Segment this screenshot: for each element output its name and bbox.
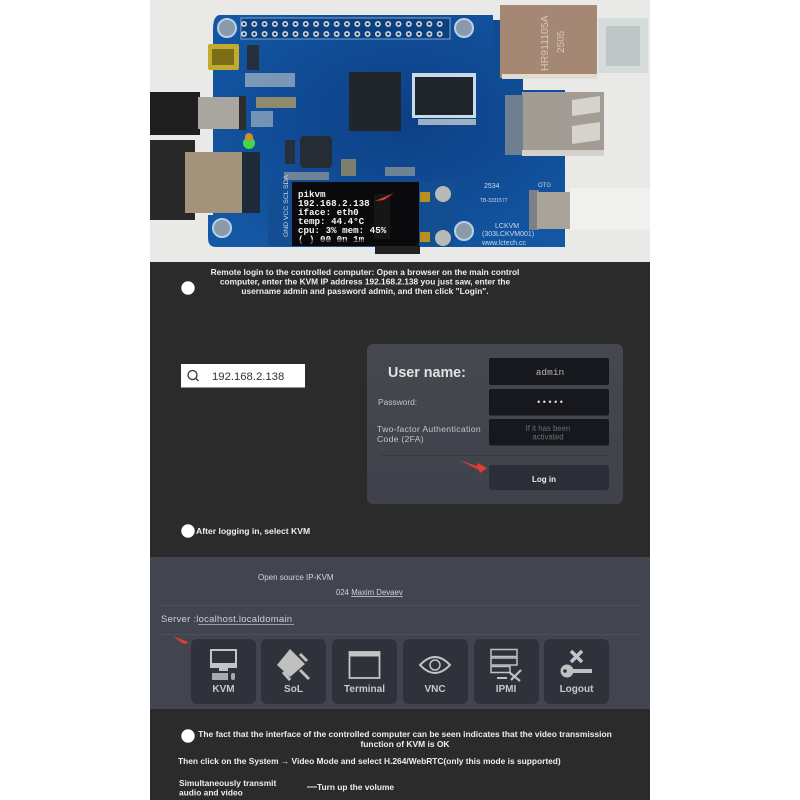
controller chip	[300, 136, 332, 168]
select KVM instruction: After logging in, select KVM	[196, 526, 310, 536]
VNC tile	[403, 639, 468, 704]
two-factor field	[489, 419, 609, 446]
login button: Log in	[532, 475, 556, 484]
pin header	[241, 18, 450, 39]
SoL tile	[261, 639, 326, 704]
status LED	[243, 133, 255, 149]
OLED module: iface: eth0	[298, 207, 359, 218]
Terminal tile	[332, 639, 397, 704]
remote login instructions: computer, enter the KVM IP address 192.168.2.138 you just saw, enter the	[220, 276, 511, 286]
mounting holes	[213, 19, 473, 240]
video mode instruction: Then click on the System → Video Mode and select H.264/WebRTC(only this mode is supported)	[178, 756, 561, 766]
OLED module: GND VCC SCL SDA	[283, 174, 290, 237]
SoL tile: SoL	[284, 684, 303, 695]
ethernet port: HR911105A	[539, 15, 551, 71]
ethernet port	[493, 5, 648, 92]
board silkscreen text: www.lctech.cc	[481, 240, 526, 247]
Logout tile	[544, 639, 609, 704]
login button	[489, 465, 609, 490]
OLED module: 192.168.2.138	[298, 198, 370, 209]
OLED module: temp: 44.4°C	[298, 216, 365, 227]
ethernet port: 2505	[556, 30, 567, 53]
panel: login form	[367, 344, 623, 504]
address bar	[181, 364, 305, 388]
panel: KVM menu	[150, 557, 650, 709]
user name label: User name:	[388, 365, 466, 381]
username field: admin	[536, 367, 564, 378]
arrow: to login button	[459, 460, 487, 473]
volume instruction: Turn up the volume	[317, 782, 394, 792]
two-factor label	[377, 424, 481, 444]
password label: Password:	[378, 397, 417, 407]
arrow: to KVM	[173, 636, 188, 644]
memory chip	[412, 73, 476, 118]
OLED module: pikvm	[298, 189, 326, 200]
board silkscreen text	[480, 183, 551, 247]
two-factor field: activated	[532, 432, 564, 442]
server name: Server :localhost.localdomain	[161, 614, 292, 625]
USB-C cable left	[150, 92, 246, 135]
video transmission note: function of KVM is OK	[360, 739, 450, 749]
video transmission note: The fact that the interface of the controlled computer can be seen indicates that the video transmission	[198, 729, 612, 739]
USB-A port	[505, 92, 604, 156]
remote login instructions	[211, 267, 519, 296]
HDMI cable	[150, 140, 260, 220]
OLED module	[268, 174, 454, 254]
open source label: Open source IP-KVM	[258, 573, 334, 582]
main chip	[349, 72, 401, 131]
password field	[489, 389, 609, 416]
two-factor label: Two-factor Authentication	[377, 424, 481, 434]
board silkscreen text: LCKVM	[495, 223, 519, 230]
step marker 1	[181, 281, 195, 295]
OLED module: cpu: 3% mem: 45%	[298, 225, 387, 236]
IPMI tile: IPMI	[496, 684, 516, 695]
video transmission note	[198, 729, 612, 749]
OLED module: ( ) 00 0n 1m	[298, 234, 365, 245]
board silkscreen text: OTG	[538, 183, 551, 189]
password field: • • • • •	[537, 397, 563, 407]
copyright: 024 Maxim Devaev	[336, 588, 403, 597]
IPMI tile	[474, 639, 539, 704]
remote login instructions: Remote login to the controlled computer: Open a browser on the main control	[211, 267, 519, 277]
USB-C OTG port	[529, 188, 650, 230]
Logout tile: Logout	[560, 684, 594, 695]
address bar: 192.168.2.138	[212, 371, 284, 383]
KVM tile	[191, 639, 256, 704]
VNC tile: VNC	[424, 684, 446, 695]
circuit board	[208, 15, 565, 247]
panel: dark background	[150, 262, 650, 800]
board silkscreen text: (303LCKVM001)	[482, 231, 534, 238]
step marker 3	[181, 729, 195, 743]
Terminal tile: Terminal	[344, 684, 385, 695]
audio and video note: Simultaneously transmit	[179, 778, 276, 788]
step marker 2	[181, 524, 195, 538]
two-factor label: Code (2FA)	[377, 434, 424, 444]
board silkscreen text: TB-3331577	[480, 198, 508, 204]
two-factor field: If it has been	[526, 424, 570, 433]
audio and video note: audio and video	[179, 788, 243, 798]
mini USB port	[208, 44, 239, 70]
audio and video note	[179, 778, 276, 798]
panel: board photo	[150, 0, 650, 262]
small components	[247, 45, 415, 180]
KVM tile: KVM	[212, 684, 235, 695]
username field	[489, 358, 609, 385]
remote login instructions: username admin and password admin, and then click "Login".	[241, 286, 489, 296]
board silkscreen text: 2534	[484, 183, 500, 190]
